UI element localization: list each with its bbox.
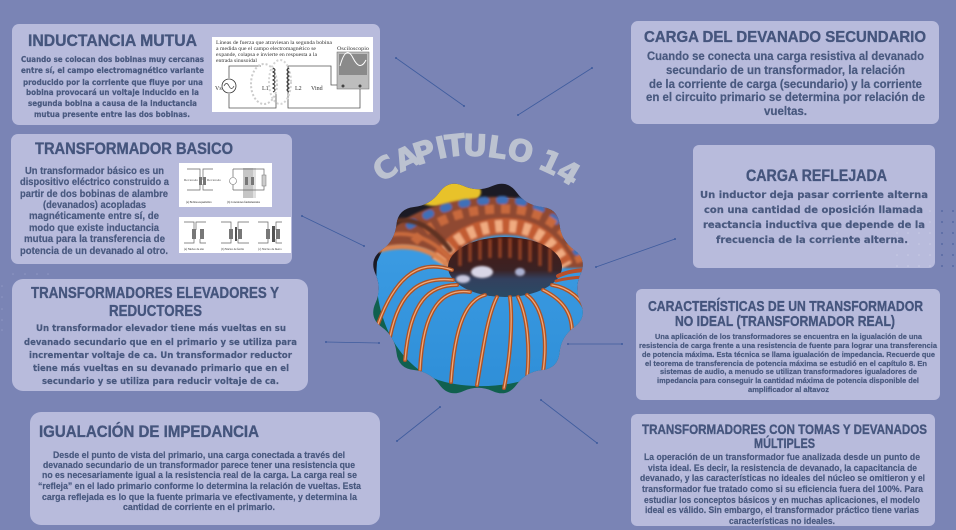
text: tomas: transformador fue tratado como si su eficiencia fuera del 100%. Para <box>642 484 924 495</box>
right windings <box>556 270 590 281</box>
text: transformador basico: partir de dos bobinas de alambre <box>20 189 168 200</box>
arrow: carga reflejada to center <box>595 238 676 268</box>
text: tomas: ideal es válido. Sin embargo, el transformador práctico tiene varias <box>645 505 919 516</box>
heading: carga devanado: CARGA DEL DEVANADO SECUNDARIO <box>644 29 926 46</box>
panel: carga reflejada <box>693 145 935 268</box>
heading: elevadores <box>31 285 280 320</box>
diagram: bobinas y osciloscopio: Vind <box>311 86 323 92</box>
diagram: bobinas y osciloscopio: L2 <box>295 86 302 92</box>
diagram: devanados: Devanado <box>207 178 222 182</box>
text: caracteristicas <box>639 332 938 394</box>
text: inductancia mutua <box>21 55 204 119</box>
text: carga reflejada: Un inductor deja pasar corriente alterna <box>700 190 928 201</box>
panel: igualacion de impedancia <box>30 412 380 525</box>
text: elevadores: secundario y se utiliza para reducir voltaje de ca. <box>42 377 279 387</box>
text: tomas: devanado, y las características no ideales del núcleo se omitieron y el <box>640 473 925 484</box>
heading: tomas <box>642 421 927 451</box>
text: caracteristicas: sistemas de audio, a menudo se utilizan transformadores igualadores de <box>660 367 917 376</box>
diagram: devanados: Devanado <box>184 178 198 182</box>
arrow: basico to center <box>301 215 365 247</box>
text: igualacion: cantidad de corriente en el primario. <box>123 502 275 512</box>
text: transformador basico: Un transformador básico es un <box>25 166 164 177</box>
text: transformador basico: magnéticamente entre sí, de <box>29 211 159 222</box>
arrow: carga secundario to center <box>517 67 593 116</box>
diagram: bobinas y osciloscopio: expande, colapsa e invierte en respuesta a la <box>216 53 318 58</box>
back windings <box>376 197 594 268</box>
text: carga reflejada: reactancia inductiva que depende de la <box>703 220 925 231</box>
text: carga devanado: en el circuito primario se determina por relación de <box>646 92 925 104</box>
panel: transformadores elevadores y reductores <box>12 279 308 391</box>
text: caracteristicas: el teorema de transferencia de potencia máxima se estudió en el capítulo 8. En <box>645 359 927 368</box>
text: inductancia mutua: producido por la corriente que fluye por una <box>23 78 203 87</box>
text: transformador basico: potencia de un devanado al otro. <box>20 246 168 257</box>
text: transformador basico <box>20 166 169 257</box>
text: caracteristicas: Una aplicación de los transformadores se encuentra en la igualación de una <box>655 332 923 341</box>
decorative dots left <box>1 273 49 331</box>
diagram: bobinas y osciloscopio: Vs <box>215 86 222 92</box>
arrow: caracteristicas to center <box>567 343 623 345</box>
diagram: tipos de nucleo: (c) Núcleo de hierro <box>258 247 282 251</box>
text: transformador basico: dispositivo eléctrico construido a <box>20 177 169 188</box>
text: carga devanado: secundario de un transformador, la relación <box>666 65 905 77</box>
text: transformador basico: (devanados) acopladas <box>43 200 146 211</box>
heading: inductancia mutua: INDUCTANCIA MUTUA <box>28 31 197 50</box>
heading: elevadores: REDUCTORES <box>109 303 202 320</box>
arrow: tomas to center <box>540 399 598 444</box>
heading: carga reflejada: CARGA REFLEJADA <box>746 167 887 185</box>
text: carga devanado: vueltas. <box>764 106 807 118</box>
text: caracteristicas: de potencia máxima. Esta técnica se llama igualación de impedancia. Recuerde que <box>642 350 935 359</box>
icon: toroidal transformer photo <box>373 184 583 394</box>
heading: elevadores: TRANSFORMADORES ELEVADORES Y <box>31 285 280 302</box>
text: carga devanado <box>646 51 925 118</box>
text: caracteristicas: amplificador al altavoz <box>748 385 829 394</box>
diagram: devanados: (a) Bobina esquemático <box>186 200 212 204</box>
heading: caracteristicas: NO IDEAL (TRANSFORMADOR REAL) <box>675 313 895 330</box>
torus body <box>376 198 592 386</box>
diagram: bobinas y osciloscopio: L1 <box>262 86 269 92</box>
text: inductancia mutua: segunda bobina a causa de la inductancia <box>28 99 197 108</box>
heading: caracteristicas <box>648 298 923 330</box>
text: igualacion: carga reflejada es lo que la fuente primaria ve efectivamente, y determina la <box>42 492 357 502</box>
text: elevadores: devanado secundario que en el primario y se utiliza para <box>24 338 297 348</box>
heading: igualacion: IGUALACIÓN DE IMPEDANCIA <box>39 422 259 441</box>
front windings <box>377 267 585 388</box>
text: tomas: La operación de un transformador fue analizada desde un punto de <box>644 452 920 463</box>
text: transformador basico: mutua para la transferencia de <box>24 234 165 245</box>
diagram: bobinas y osciloscopio: entrada sinusoidal <box>216 59 258 64</box>
hole <box>448 237 562 297</box>
text: caracteristicas: impedancia para conseguir la cantidad máxima de potencia disponible del <box>657 376 919 385</box>
panel: carga del devanado secundario <box>631 21 939 124</box>
diagram: devanados <box>179 163 272 207</box>
diagram: bobinas y osciloscopio <box>212 37 373 112</box>
text: carga reflejada <box>700 190 928 246</box>
text: inductancia mutua: bobina provocará un voltaje inducido en la <box>26 88 199 97</box>
text: tomas: características no ideales. <box>729 516 835 527</box>
text: igualacion <box>38 450 361 512</box>
text: elevadores <box>24 324 297 387</box>
decorative dots right <box>896 210 954 267</box>
text: elevadores: tiene más vueltas en su devanado primario que en el <box>33 364 289 374</box>
text: carga reflejada: frecuencia de la corriente alterna. <box>716 235 908 246</box>
front winding highlights <box>377 267 585 388</box>
text: igualacion: devanado secundario de un transformador parece tener una resistencia que <box>43 460 355 470</box>
panel: transformador basico <box>11 134 292 264</box>
heading: tomas: MÚLTIPLES <box>754 434 815 451</box>
arrow: elevadores to center <box>325 341 380 344</box>
heading: transformador basico: TRANSFORMADOR BASICO <box>35 139 233 158</box>
text: igualacion: no es necesariamente igual a la resistencia real de la carga. La carga real se <box>42 470 357 480</box>
diagram: bobinas y osciloscopio: Líneas de fuerza que atraviesan la segunda bobina <box>216 41 333 46</box>
diagram: bobinas y osciloscopio: a medida que el campo electromagnético se <box>216 47 316 52</box>
left top windings <box>380 220 452 270</box>
text: transformador basico: modo que existe inductancia <box>29 223 159 234</box>
arrow: igualacion to center <box>396 406 441 442</box>
arrow: inductancia to center <box>395 57 465 107</box>
text: tomas: estudiar los conceptos básicos y en muchas aplicaciones, el modelo <box>644 495 920 506</box>
text: inductancia mutua: Cuando se colocan dos bobinas muy cercanas <box>21 55 204 64</box>
diagram: bobinas y osciloscopio: Osciloscopio <box>337 47 370 52</box>
panel: caracteristicas de un transformador no ideal <box>636 289 940 400</box>
text: carga reflejada: con una cantidad de oposición llamada <box>704 204 923 216</box>
text: igualacion: Desde el punto de vista del primario, una carga conectada a través del <box>53 450 345 460</box>
panel: transformadores con tomas y devanados multiples <box>631 414 935 527</box>
text: caracteristicas: resistencia de carga frente a una resistencia de fuente para lograr una transferencia <box>639 341 938 350</box>
diagram: tipos de nucleo <box>179 217 291 253</box>
text: inductancia mutua: mutua presente entre las dos bobinas. <box>34 110 190 119</box>
diagram: tipos de nucleo: (b) Núcleo de ferrita <box>221 247 245 251</box>
diagram: devanados: (b) Conexiones fundamentales <box>227 200 261 204</box>
text: elevadores: incrementar voltaje de ca. Un transformador reductor <box>29 351 293 361</box>
text: elevadores: Un transformador elevador tiene más vueltas en su <box>36 324 286 334</box>
text: carga devanado: Cuando se conecta una carga resistiva al devanado <box>647 51 924 63</box>
text: tomas: vista ideal. Es decir, la resistencia de devanado, la capacitancia de <box>648 463 917 474</box>
text: igualacion: “refleja” en el lado primario conforme lo determina la relación de vueltas. Esta <box>38 481 361 491</box>
title: capitulo 14: CAPITULO 14 <box>367 128 586 194</box>
text: carga devanado: de la corriente de carga (secundario) y la corriente <box>649 79 922 91</box>
diagram: tipos de nucleo: (a) Núcleo de aire <box>184 247 205 251</box>
panel: inductancia mutua <box>12 24 380 125</box>
text: inductancia mutua: entre sí, el campo electromagnético variante <box>21 66 204 75</box>
text: tomas <box>640 452 925 527</box>
